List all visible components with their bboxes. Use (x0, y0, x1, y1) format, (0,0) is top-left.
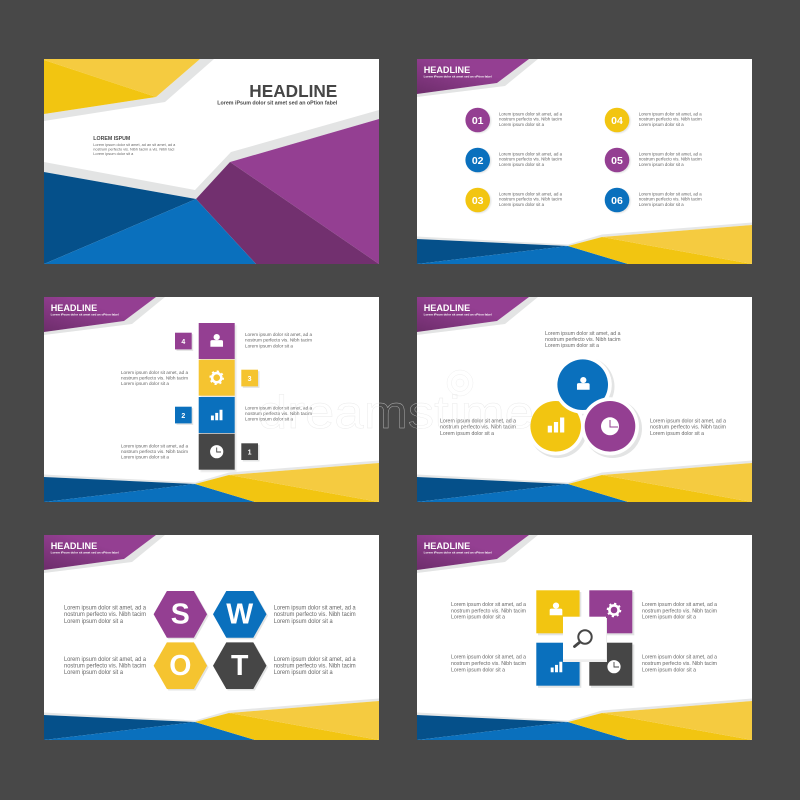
step 4 block (199, 323, 235, 359)
item 04: Lorem ipsum dolor sit amet, ad a (639, 112, 702, 118)
text bottom left: Lorem ipsum dolor sit amet, ad a (451, 655, 526, 661)
top text: Lorem ipsum dolor sit a (545, 343, 599, 349)
text W (274, 604, 356, 625)
text S: Lorem ipsum dolor sit amet, ad a (64, 604, 147, 612)
text bottom right: Lorem ipsum dolor sit amet, ad a (642, 655, 717, 661)
yellow corner shape (44, 59, 200, 114)
left text: Lorem ipsum dolor sit amet, ad a (440, 419, 516, 425)
panel: vertical timeline slide (44, 297, 379, 502)
left text: nostrum perfecto vis. Nibh tacim (440, 425, 516, 431)
text S: nostrum perfecto vis. Nibh tacim (64, 611, 146, 618)
text W: Lorem ipsum dolor sit a (274, 618, 333, 625)
text for step 3: Lorem ipsum dolor sit amet, ad a (121, 370, 188, 376)
slide header: Lorem iPsum dolor sit amet sed an oPtion fabel (424, 551, 492, 555)
square shadows (538, 592, 634, 688)
item 05: Lorem ipsum dolor sit a (639, 162, 684, 168)
slide header: Lorem iPsum dolor sit amet sed an oPtion fabel (424, 313, 492, 317)
purple circle with clock icon (581, 397, 639, 455)
text O: Lorem ipsum dolor sit a (64, 669, 124, 676)
purple square (589, 590, 632, 633)
top text (545, 331, 621, 349)
item 05: Lorem ipsum dolor sit amet, ad a (639, 152, 702, 158)
panel: title slide (44, 59, 379, 264)
item 02: Lorem ipsum dolor sit amet, ad a (499, 152, 562, 158)
text for step 4: Lorem ipsum dolor sit amet, ad a (245, 332, 312, 338)
lorem ipsum block: Lorem ipsum dolor sit a (93, 151, 134, 156)
blue circle with person icon (557, 359, 608, 410)
item 05 (605, 148, 702, 173)
item 04: Lorem ipsum dolor sit a (639, 122, 684, 128)
item 03: 03 (472, 195, 484, 207)
item 04 (605, 108, 702, 133)
left text: Lorem ipsum dolor sit a (440, 431, 494, 437)
item 01: Lorem ipsum dolor sit amet, ad a (499, 112, 562, 118)
text for step 1 (121, 443, 188, 461)
gray band lower (44, 110, 379, 199)
top text: Lorem ipsum dolor sit amet, ad a (545, 331, 621, 337)
text for step 4: nostrum perfecto vis. Nibh tacim (245, 338, 312, 344)
text bottom left: Lorem ipsum dolor sit a (451, 667, 505, 673)
badge 3: 3 (248, 376, 252, 383)
text for step 2 (245, 405, 312, 423)
badge 2: 2 (181, 413, 185, 420)
text top left: Lorem ipsum dolor sit a (451, 615, 505, 621)
slide header: HEADLINE (424, 302, 470, 313)
watermark (258, 370, 534, 438)
text top left: nostrum perfecto vis. Nibh tacim (451, 608, 526, 614)
text for step 1: Lorem ipsum dolor sit amet, ad a (121, 443, 188, 449)
item 01: Lorem ipsum dolor sit a (499, 122, 544, 128)
hexagon T (213, 642, 266, 689)
title subtitle: Lorem iPsum dolor sit amet sed an oPtion fabel (217, 101, 338, 107)
step 2 block (199, 397, 235, 433)
text top right: nostrum perfecto vis. Nibh tacim (642, 608, 717, 614)
center white square with magnifier (563, 617, 607, 662)
item 01: nostrum perfecto vis. Nibh tacim (499, 117, 562, 123)
slide header: HEADLINE (424, 540, 470, 551)
step 1 block (199, 434, 235, 470)
badge 1: 1 (248, 450, 252, 457)
hexagon S (154, 591, 207, 638)
text for step 4: Lorem ipsum dolor sit a (245, 343, 293, 349)
badge 4: 4 (181, 339, 185, 346)
lorem ipsum block: Lorem ipsum dolor sit amet, ad an sit amet, ad a (93, 142, 176, 147)
hexagon O (154, 642, 207, 689)
text for step 2: Lorem ipsum dolor sit amet, ad a (245, 405, 312, 411)
item 02: 02 (472, 155, 484, 167)
hexagon W (213, 591, 266, 638)
text T: Lorem ipsum dolor sit a (274, 669, 333, 676)
text O (64, 656, 147, 676)
panel: three circles slide (417, 297, 752, 502)
text W: Lorem ipsum dolor sit amet, ad a (274, 604, 356, 612)
text top right: Lorem ipsum dolor sit a (642, 615, 696, 621)
text W: nostrum perfecto vis. Nibh tacim (274, 611, 356, 618)
item 05: 05 (611, 155, 623, 167)
text top right (642, 602, 717, 621)
text for step 2: Lorem ipsum dolor sit a (245, 417, 293, 423)
text for step 3: nostrum perfecto vis. Nibh tacim (121, 376, 188, 382)
badge 4 (175, 333, 193, 351)
blue square (536, 643, 580, 686)
column shadow (200, 325, 236, 472)
right text: nostrum perfecto vis. Nibh tacim (650, 425, 726, 431)
text bottom right (642, 655, 717, 673)
text T: Lorem ipsum dolor sit amet, ad a (274, 656, 356, 663)
left text (440, 419, 516, 437)
item 06: 06 (611, 195, 623, 207)
circle white rings (527, 356, 612, 455)
lorem ipsum block (93, 136, 176, 156)
item 02 (465, 148, 562, 173)
hexagon S: S (171, 599, 190, 631)
text bottom left: nostrum perfecto vis. Nibh tacim (451, 661, 526, 667)
badge 2 (175, 407, 193, 425)
slide header: Lorem iPsum dolor sit amet sed an oPtion fabel (51, 313, 119, 317)
text top left (451, 602, 526, 621)
right text: Lorem ipsum dolor sit amet, ad a (650, 419, 726, 425)
lorem ipsum block: LOREM ISPUM (93, 136, 131, 142)
text for step 4 (245, 332, 312, 349)
badge 3 (241, 370, 260, 388)
item 01 (465, 108, 562, 133)
text bottom left (451, 655, 526, 673)
panel: four squares slide (417, 535, 752, 740)
title headline: HEADLINE (249, 81, 337, 101)
item 06: nostrum perfecto vis. Nibh tacim (639, 197, 702, 203)
text for step 3 (121, 370, 188, 387)
yellow circle with chart icon (530, 356, 612, 452)
item 04: 04 (611, 115, 623, 127)
hexagon T: T (231, 650, 249, 682)
item 03: Lorem ipsum dolor sit amet, ad a (499, 192, 562, 198)
slide header: HEADLINE (424, 64, 470, 75)
text S: Lorem ipsum dolor sit a (64, 618, 124, 625)
lorem ipsum block: nostrum perfecto vis. Nibh tacim a vis. Nibh taci (93, 147, 174, 152)
dark square (589, 643, 632, 686)
item 03: Lorem ipsum dolor sit a (499, 202, 544, 208)
item 02: nostrum perfecto vis. Nibh tacim (499, 157, 562, 163)
item 06 (605, 188, 702, 213)
item 05: nostrum perfecto vis. Nibh tacim (639, 157, 702, 163)
badge 1 (241, 443, 260, 462)
slide header (424, 540, 492, 555)
slide header (51, 540, 119, 555)
gray band top (44, 59, 214, 121)
text top left: Lorem ipsum dolor sit amet, ad a (451, 602, 526, 608)
item 03 (465, 188, 562, 213)
slide header (424, 64, 492, 79)
item 02: Lorem ipsum dolor sit a (499, 162, 544, 168)
right text: Lorem ipsum dolor sit a (650, 431, 704, 437)
text S (64, 604, 147, 625)
hexagon shadows (155, 592, 268, 690)
panel: numbered list slide (417, 59, 752, 264)
text T (274, 656, 356, 676)
purple facets (196, 119, 379, 264)
item 04: nostrum perfecto vis. Nibh tacim (639, 117, 702, 123)
slide header (51, 302, 119, 317)
slide header: HEADLINE (51, 540, 97, 551)
top text: nostrum perfecto vis. Nibh tacim (545, 337, 621, 343)
text top right: Lorem ipsum dolor sit amet, ad a (642, 602, 717, 608)
watermark: dreamstime (258, 386, 534, 438)
yellow square (536, 590, 580, 633)
item 03: nostrum perfecto vis. Nibh tacim (499, 197, 562, 203)
circle shadows (528, 357, 642, 458)
item 06: Lorem ipsum dolor sit amet, ad a (639, 192, 702, 198)
text for step 3: Lorem ipsum dolor sit a (121, 381, 169, 387)
blue facets (44, 172, 256, 264)
right text (650, 419, 726, 437)
text for step 1: nostrum perfecto vis. Nibh tacim (121, 449, 188, 455)
text for step 2: nostrum perfecto vis. Nibh tacim (245, 411, 312, 417)
text bottom right: Lorem ipsum dolor sit a (642, 667, 696, 673)
item 01: 01 (472, 115, 484, 127)
text T: nostrum perfecto vis. Nibh tacim (274, 662, 356, 670)
panel: SWOT slide (44, 535, 379, 740)
slide header (424, 302, 492, 317)
slide header: Lorem iPsum dolor sit amet sed an oPtion fabel (424, 75, 492, 79)
text O: nostrum perfecto vis. Nibh tacim (64, 662, 146, 670)
text for step 1: Lorem ipsum dolor sit a (121, 455, 169, 461)
slide header: Lorem iPsum dolor sit amet sed an oPtion fabel (51, 551, 119, 555)
hexagon O: O (169, 650, 191, 682)
text bottom right: nostrum perfecto vis. Nibh tacim (642, 661, 717, 667)
text O: Lorem ipsum dolor sit amet, ad a (64, 656, 147, 663)
item 06: Lorem ipsum dolor sit a (639, 202, 684, 208)
hexagon W: W (226, 599, 253, 631)
slide header: HEADLINE (51, 302, 97, 313)
step 3 block (199, 360, 235, 396)
